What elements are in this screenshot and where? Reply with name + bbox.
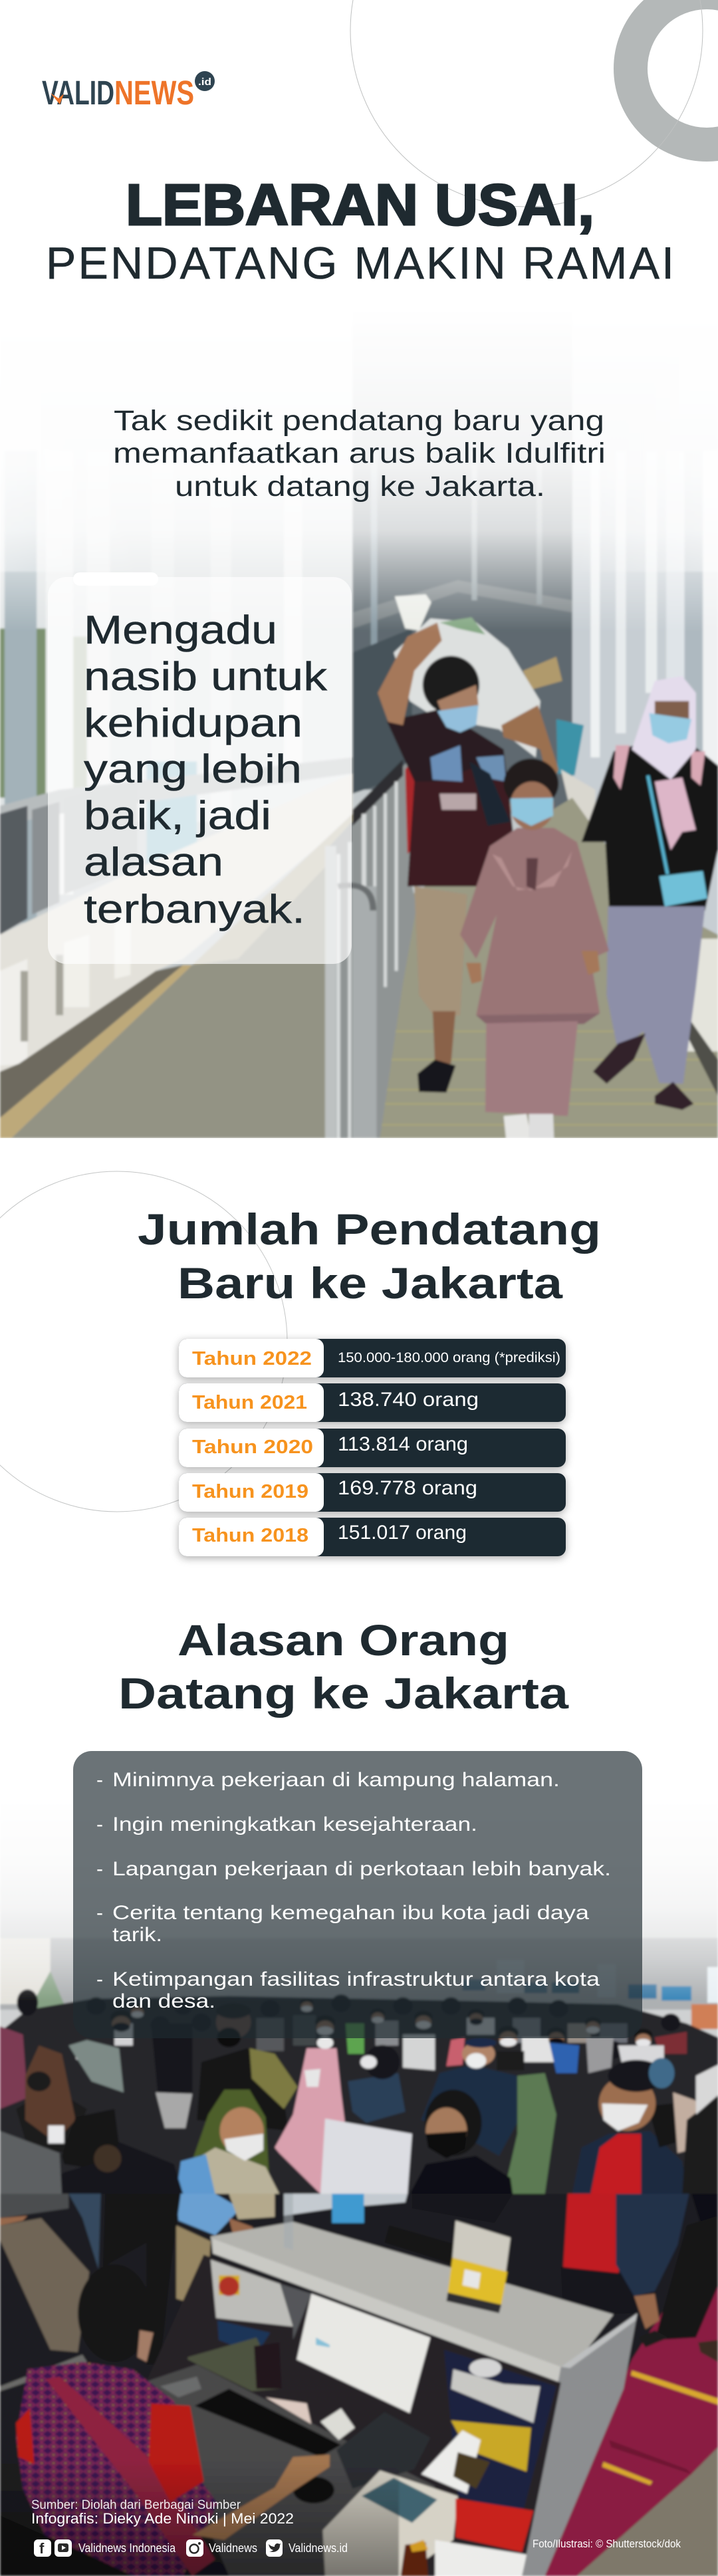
desk [146,2365,435,2576]
black cap man [61,2109,184,2196]
reason list: - [96,1858,103,1880]
reason list: Cerita tentang kemegahan ibu kota jadi daya [112,1902,589,1924]
person: woman in hijab [582,676,718,1110]
photo fade [0,279,718,632]
reason list: Ketimpangan fasilitas infrastruktur antara kota [112,1968,600,1990]
photo: crowded check-in counter [0,1892,718,2576]
heading: alasan orang [118,1615,570,1718]
heading: jumlah pendatang: Jumlah Pendatang [138,1205,601,1254]
intro text: Tak sedikit pendatang baru yang [114,405,604,437]
pill tab [73,572,158,586]
left railing [0,757,352,826]
shelf [444,2350,556,2516]
social links: Validnews [209,2541,257,2555]
counter top [211,2222,614,2383]
panel text [84,608,328,931]
counter device left [0,2131,62,2194]
panel: reasons [73,1751,642,2038]
man in red shirt [572,2058,718,2194]
people behind counter [561,2194,718,2362]
icon: facebook [34,2539,51,2557]
row 2020: 113.814 orang [338,1433,468,1455]
heading: alasan orang: Alasan Orang [178,1615,509,1665]
woman's left desk [0,2355,87,2391]
row 2018: Tahun 2018 [192,1525,308,1546]
panel text: kehidupan [84,701,302,745]
icon: instagram [186,2539,203,2557]
roof [351,457,574,810]
reason list: Minimnya pekerjaan di kampung halaman. [112,1769,560,1791]
front left woman [16,2046,87,2153]
row 2019: 169.778 orang [338,1477,477,1499]
source credits: Sumber: Diolah dari Berbagai Sumber [31,2498,241,2512]
row 2022: Tahun 2022 [192,1348,312,1369]
social links: Validnews Indonesia [78,2541,176,2555]
heading: jumlah pendatang [138,1205,601,1308]
decor: ring [630,0,718,145]
reason list: - [96,1902,103,1924]
back row shirts [114,2015,628,2070]
reason list: dan desa. [112,1990,215,2012]
notice sign [320,2119,412,2194]
row 2021 [179,1383,566,1422]
black haired staff [410,2089,513,2194]
row 2022 [179,1339,566,1377]
source credits: Infografis: Dieky Ade Ninoki | Mei 2022 [31,2510,294,2527]
bridge wall [0,811,352,1072]
social links: Validnews.id [289,2541,348,2555]
social links [34,2539,348,2557]
photo credit: Foto/Ilustrasi: © Shutterstock/dok [533,2537,681,2550]
person: girl in mauve [460,759,609,1138]
panel text: Mengadu [84,608,277,652]
decor: section circle [0,1171,287,1512]
panel text: nasib untuk [84,654,328,699]
logo [42,71,215,112]
sign [452,2220,511,2272]
shirts [655,2032,687,2053]
photo: travellers on the bridge [0,407,718,1138]
title: LEBARAN USAI, [126,173,594,237]
logo: VALID [42,74,114,112]
seated staff [16,2264,330,2576]
reason list: - [96,1968,103,1990]
reason list: - [96,1769,103,1791]
paper roll [421,2430,481,2494]
concrete floor [11,868,326,1138]
intro text [113,405,606,503]
printer dark [336,2412,430,2489]
monitor [297,2293,430,2413]
panel text: alasan [84,840,223,884]
table: newcomers per year [179,1339,566,1556]
fragile stickers [455,2498,533,2552]
counter area [0,2194,718,2576]
under counter [146,2255,561,2576]
fence [325,759,417,1138]
crowd area [0,1892,718,2196]
green hijab staff [176,2089,279,2194]
title: PENDATANG MAKIN RAMAI [46,238,674,289]
logo: .id [198,76,211,88]
row 2020 [179,1429,566,1467]
row 2020: Tahun 2020 [192,1437,313,1458]
label printer [323,2470,458,2576]
row 2021: 138.740 orang [338,1389,479,1411]
heading: alasan orang: Datang ke Jakarta [118,1669,570,1718]
bottom darken [0,2460,399,2576]
logo: NEWS [114,74,194,112]
fade into white [0,1762,718,2001]
panel text: baik, jadi [84,793,271,838]
row 2018 [179,1518,566,1556]
icon: twitter [266,2539,283,2557]
panel text: terbanyak. [84,887,305,931]
person: man carrying sack [378,594,558,1093]
title [46,173,674,289]
navy shirt man and woman [317,2037,556,2194]
row 2022: 150.000-180.000 orang (*prediksi) [338,1350,560,1365]
source credits [31,2498,294,2527]
intro text: untuk datang ke Jakarta. [175,471,545,503]
pillar [522,2313,638,2576]
reason list: tarik. [112,1924,162,1946]
crowd mass [0,1996,718,2194]
back row heads [17,1989,680,2070]
chair [0,2516,133,2576]
carpet [540,2252,718,2576]
row 2019: Tahun 2019 [192,1481,308,1502]
pink hijab woman [275,2048,348,2194]
right walkway [378,798,718,1138]
reason list: Ingin meningkatkan kesejahteraan. [112,1814,477,1835]
panel text: yang lebih [84,747,302,791]
man in black with masks [197,2004,298,2131]
reason list [96,1769,611,2012]
row 2018: 151.017 orang [338,1522,467,1544]
row 2019 [179,1473,566,1512]
row 2021: Tahun 2021 [192,1392,307,1413]
panel: main reason [48,572,352,964]
decor: thin circle [350,0,703,207]
intro text: memanfaatkan arus balik Idulfitri [113,437,606,469]
icon: youtube [55,2539,72,2557]
left bridge columns [0,540,354,820]
reason list: - [96,1814,103,1835]
reason list: Lapangan pekerjaan di perkotaan lebih banyak. [112,1858,611,1880]
heading: jumlah pendatang: Baru ke Jakarta [178,1258,564,1308]
icon: facebook: f [39,2540,45,2557]
